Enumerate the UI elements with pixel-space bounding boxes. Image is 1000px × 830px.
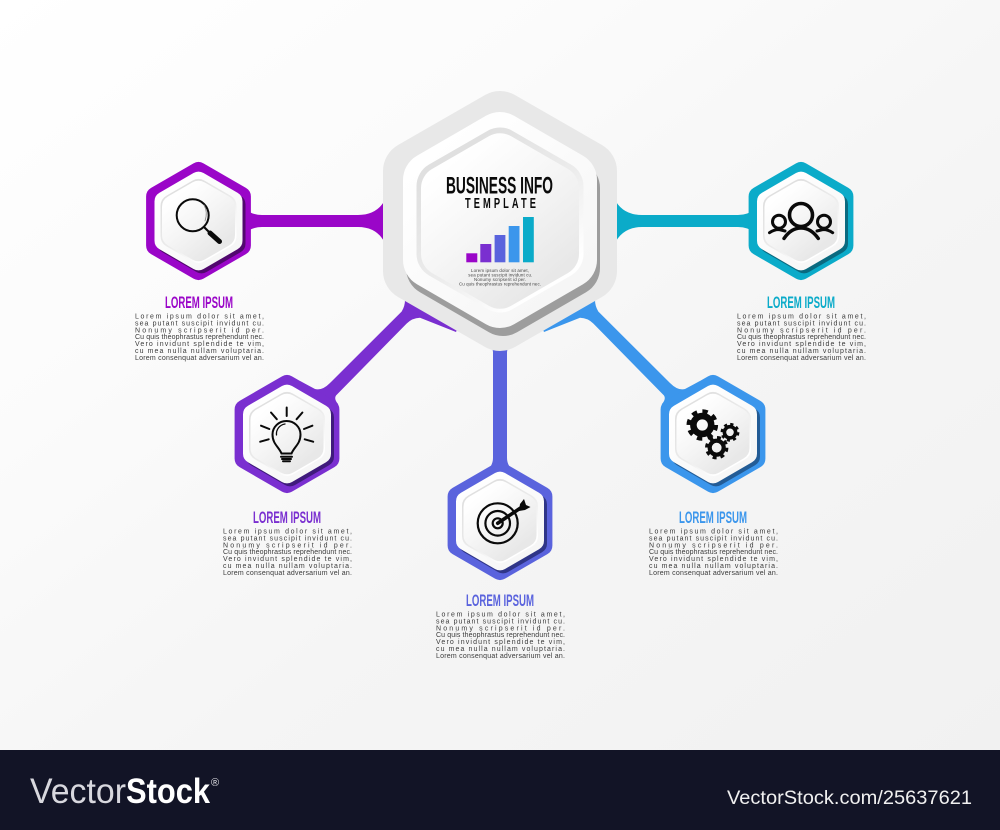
text block: team: Lorem consenquat adversarium vel an. — [737, 355, 866, 362]
text block: target: Lorem consenquat adversarium vel an. — [436, 653, 565, 660]
node: idea — [245, 385, 329, 483]
text block: settings: sea putant suscipit invidunt cu. — [649, 535, 778, 542]
icon: light bulb — [260, 408, 313, 461]
footer bar — [0, 750, 1000, 830]
text block: team: cu mea nulla nullam voluptaria. — [737, 348, 866, 355]
text block: team: Vero invidunt splendide te vim, — [737, 341, 866, 348]
connector: blue diagonal — [530, 300, 700, 420]
footer bar: Stock — [126, 772, 210, 811]
text block: team: Cu quis theophrastus reprehendunt nec. — [737, 334, 866, 341]
text block: target: Lorem ipsum dolor sit amet, — [436, 611, 565, 618]
text block: settings — [649, 508, 778, 577]
text block: target: Vero invidunt splendide te vim, — [436, 639, 565, 646]
text block: team: sea putant suscipit invidunt cu. — [737, 320, 866, 327]
node: target — [458, 472, 542, 570]
text block: target — [436, 591, 565, 660]
title — [446, 172, 553, 212]
text block: search: Cu quis theophrastus reprehendunt nec. — [135, 334, 264, 341]
text block: target: sea putant suscipit invidunt cu. — [436, 618, 565, 625]
footer bar: VectorStock.com/25637621 — [727, 787, 972, 809]
text block: target: Cu quis theophrastus reprehendunt nec. — [436, 632, 565, 639]
text block: idea: sea putant suscipit invidunt cu. — [223, 535, 352, 542]
text block: team: Lorem ipsum dolor sit amet, — [737, 313, 866, 320]
text block: idea: Nonumy scripserit id per. — [223, 542, 352, 549]
central hexagon — [413, 121, 587, 321]
text block: settings: LOREM IPSUM — [679, 508, 747, 527]
text block: search — [135, 293, 264, 362]
text block: team — [737, 293, 866, 362]
node: search — [156, 172, 241, 270]
text block: search: Nonumy scripserit id per. — [135, 327, 264, 334]
text block: search: sea putant suscipit invidunt cu. — [135, 320, 264, 327]
text block: target: Nonumy scripserit id per. — [436, 625, 565, 632]
icon: gears — [689, 411, 738, 458]
text block: settings: cu mea nulla nullam voluptaria. — [649, 563, 778, 570]
text block: target: LOREM IPSUM — [466, 591, 534, 610]
text block: search: LOREM IPSUM — [165, 293, 233, 312]
text block: team: Nonumy scripserit id per. — [737, 327, 866, 334]
text block: idea: Vero invidunt splendide te vim, — [223, 556, 352, 563]
text block: idea: cu mea nulla nullam voluptaria. — [223, 563, 352, 570]
text block: team: LOREM IPSUM — [767, 293, 835, 312]
text block: settings: Vero invidunt splendide te vim, — [649, 556, 778, 563]
icon: magnifier — [177, 199, 220, 242]
text block: settings: Cu quis theophrastus reprehendunt nec. — [649, 549, 778, 556]
icon: target with arrow — [478, 499, 530, 543]
text block: settings: Lorem consenquat adversarium vel an. — [649, 570, 778, 577]
text block: idea: Lorem consenquat adversarium vel an. — [223, 570, 352, 577]
bar chart — [466, 217, 534, 262]
connector: indigo vertical — [485, 340, 515, 473]
central caption: Nonumy scripserit id per. — [474, 277, 526, 282]
connector: cyan right — [614, 198, 755, 245]
node: settings — [671, 385, 755, 483]
text block: search: cu mea nulla nullam voluptaria. — [135, 348, 264, 355]
central caption: Cu quis theophrastus reprehendunt nec. — [459, 282, 541, 286]
text block: search: Lorem consenquat adversarium vel an. — [135, 355, 264, 362]
text block: search: Vero invidunt splendide te vim, — [135, 341, 264, 348]
text block: idea: Lorem ipsum dolor sit amet, — [223, 528, 352, 535]
icon: people — [770, 204, 833, 238]
text block: settings: Lorem ipsum dolor sit amet, — [649, 528, 778, 535]
text block: search: Lorem ipsum dolor sit amet, — [135, 313, 264, 320]
text block: idea — [223, 508, 352, 577]
title: BUSINESS INFO — [446, 172, 553, 199]
footer bar: Vector — [30, 772, 126, 811]
text block: idea: Cu quis theophrastus reprehendunt nec. — [223, 549, 352, 556]
central caption: Lorem ipsum dolor sit amet, — [471, 268, 529, 273]
connector: purple left — [245, 198, 386, 245]
text block: target: cu mea nulla nullam voluptaria. — [436, 646, 565, 653]
text block: idea: LOREM IPSUM — [253, 508, 321, 527]
node: team — [759, 172, 843, 270]
connector: violet diagonal — [300, 300, 470, 420]
central caption — [459, 268, 541, 286]
text block: settings: Nonumy scripserit id per. — [649, 542, 778, 549]
title: TEMPLATE — [465, 195, 536, 212]
footer bar: ® — [211, 777, 219, 789]
central caption: sea putant suscipit invidunt cu. — [468, 272, 532, 278]
